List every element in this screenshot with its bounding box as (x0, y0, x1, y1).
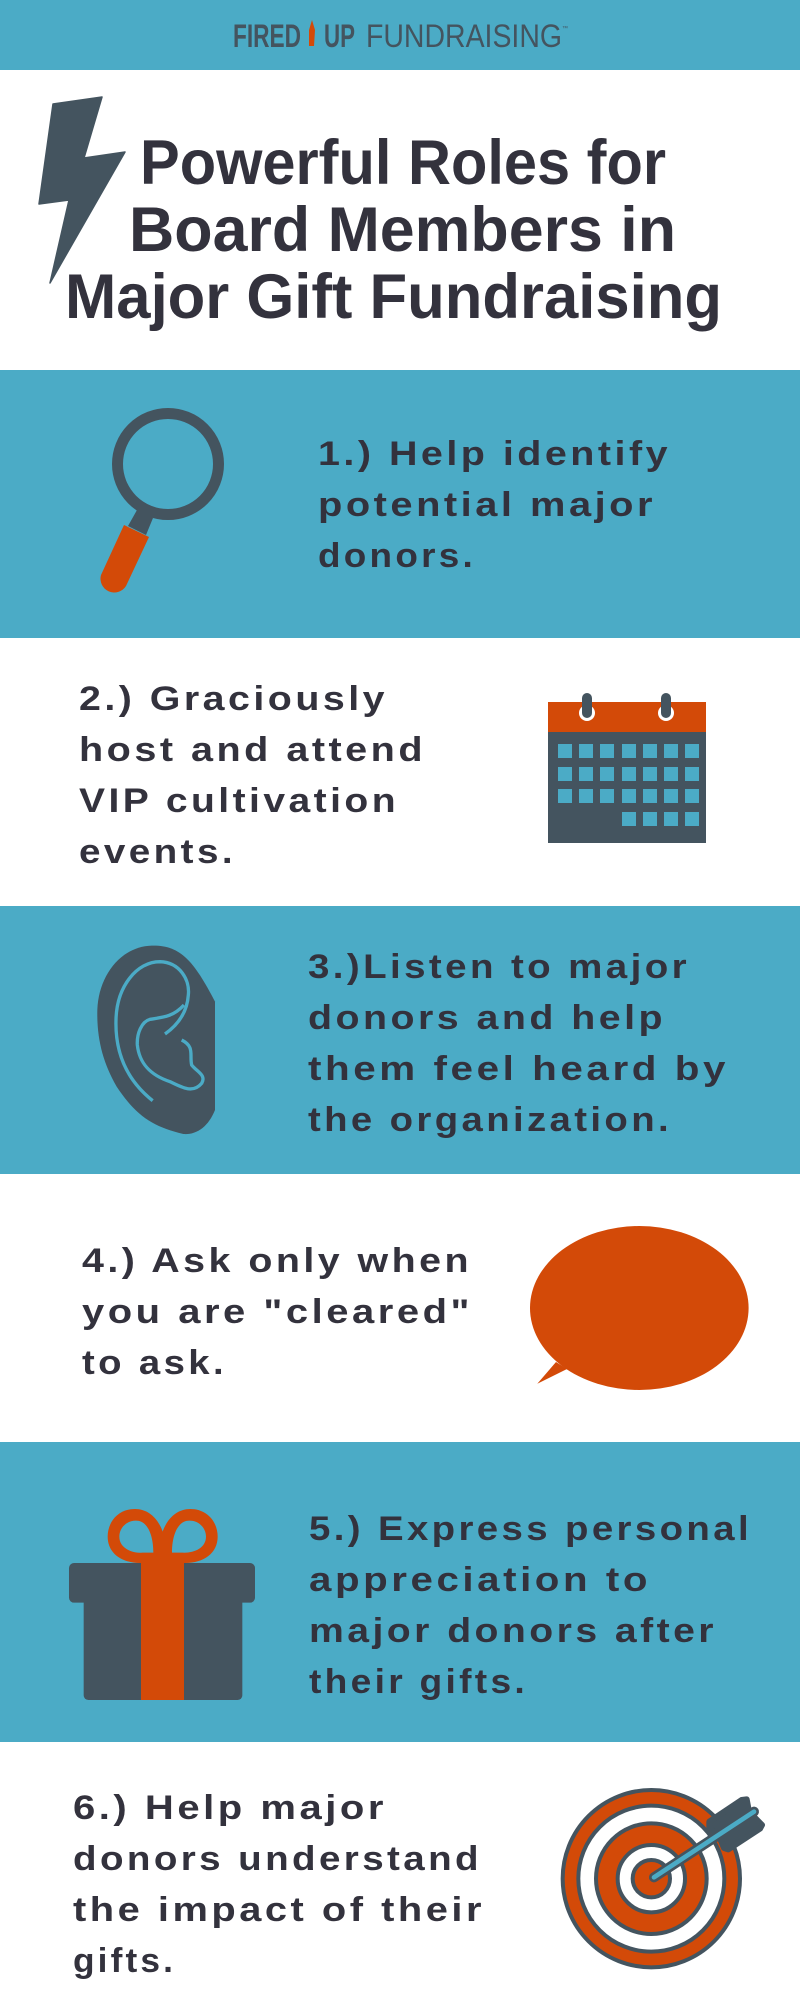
text: role 2: host and attend (79, 731, 426, 769)
text: role 3 (308, 948, 729, 1139)
text: role 4: to ask. (82, 1344, 227, 1382)
logo (233, 18, 568, 54)
logo: ™ (562, 25, 568, 32)
header band with logo (0, 0, 800, 70)
title (65, 128, 722, 332)
icon: gift box (69, 1509, 255, 1700)
text: role 1: potential major (318, 486, 656, 524)
title: Board Members in (129, 195, 676, 265)
title: Major Gift Fundraising (65, 262, 722, 332)
text: role 6: the impact of their (73, 1891, 485, 1929)
text: role 3: 3.)Listen to major (308, 948, 690, 986)
panel: role 2 (0, 638, 800, 906)
text: role 4: 4.) Ask only when (82, 1242, 472, 1280)
text: role 2: events. (79, 833, 236, 871)
panel: role 3 (0, 906, 800, 1174)
text: role 5 (309, 1510, 752, 1701)
text: role 1: donors. (318, 537, 476, 575)
panel: role 4 (0, 1174, 800, 1442)
icon: lightning bolt (39, 97, 125, 283)
icon: speech bubble (530, 1226, 749, 1390)
title: Powerful Roles for (140, 128, 666, 198)
text: role 2: 2.) Graciously (79, 680, 388, 718)
panel: role 5 (0, 1442, 800, 1742)
text: role 3: the organization. (308, 1101, 672, 1139)
text: role 6 (73, 1789, 485, 1980)
text: role 6: donors understand (73, 1840, 482, 1878)
text: role 1: 1.) Help identify (318, 435, 671, 473)
panel: role 6 (0, 1742, 800, 2000)
text: role 1 (318, 435, 671, 575)
text: role 5: appreciation to (309, 1561, 651, 1599)
text: role 3: donors and help (308, 999, 666, 1037)
text: role 3: them feel heard by (308, 1050, 729, 1088)
icon: target with arrow (563, 1790, 762, 1967)
text: role 5: their gifts. (309, 1663, 528, 1701)
icon: magnifying glass (100, 414, 218, 592)
text: role 6: 6.) Help major (73, 1789, 387, 1827)
text: role 5: 5.) Express personal (309, 1510, 752, 1548)
icon: calendar (548, 693, 706, 843)
text: role 4 (82, 1242, 473, 1382)
logo: FUNDRAISING (366, 18, 562, 54)
text: role 6: gifts. (73, 1942, 176, 1980)
icon: ear (97, 946, 215, 1134)
text: role 2 (79, 680, 426, 871)
panel: role 1 (0, 370, 800, 638)
text: role 4: you are "cleared" (82, 1293, 473, 1331)
logo: UP (324, 18, 355, 54)
text: role 2: VIP cultivation (79, 782, 399, 820)
logo: FIRED (233, 18, 301, 54)
title panel (0, 70, 800, 370)
text: role 5: major donors after (309, 1612, 717, 1650)
